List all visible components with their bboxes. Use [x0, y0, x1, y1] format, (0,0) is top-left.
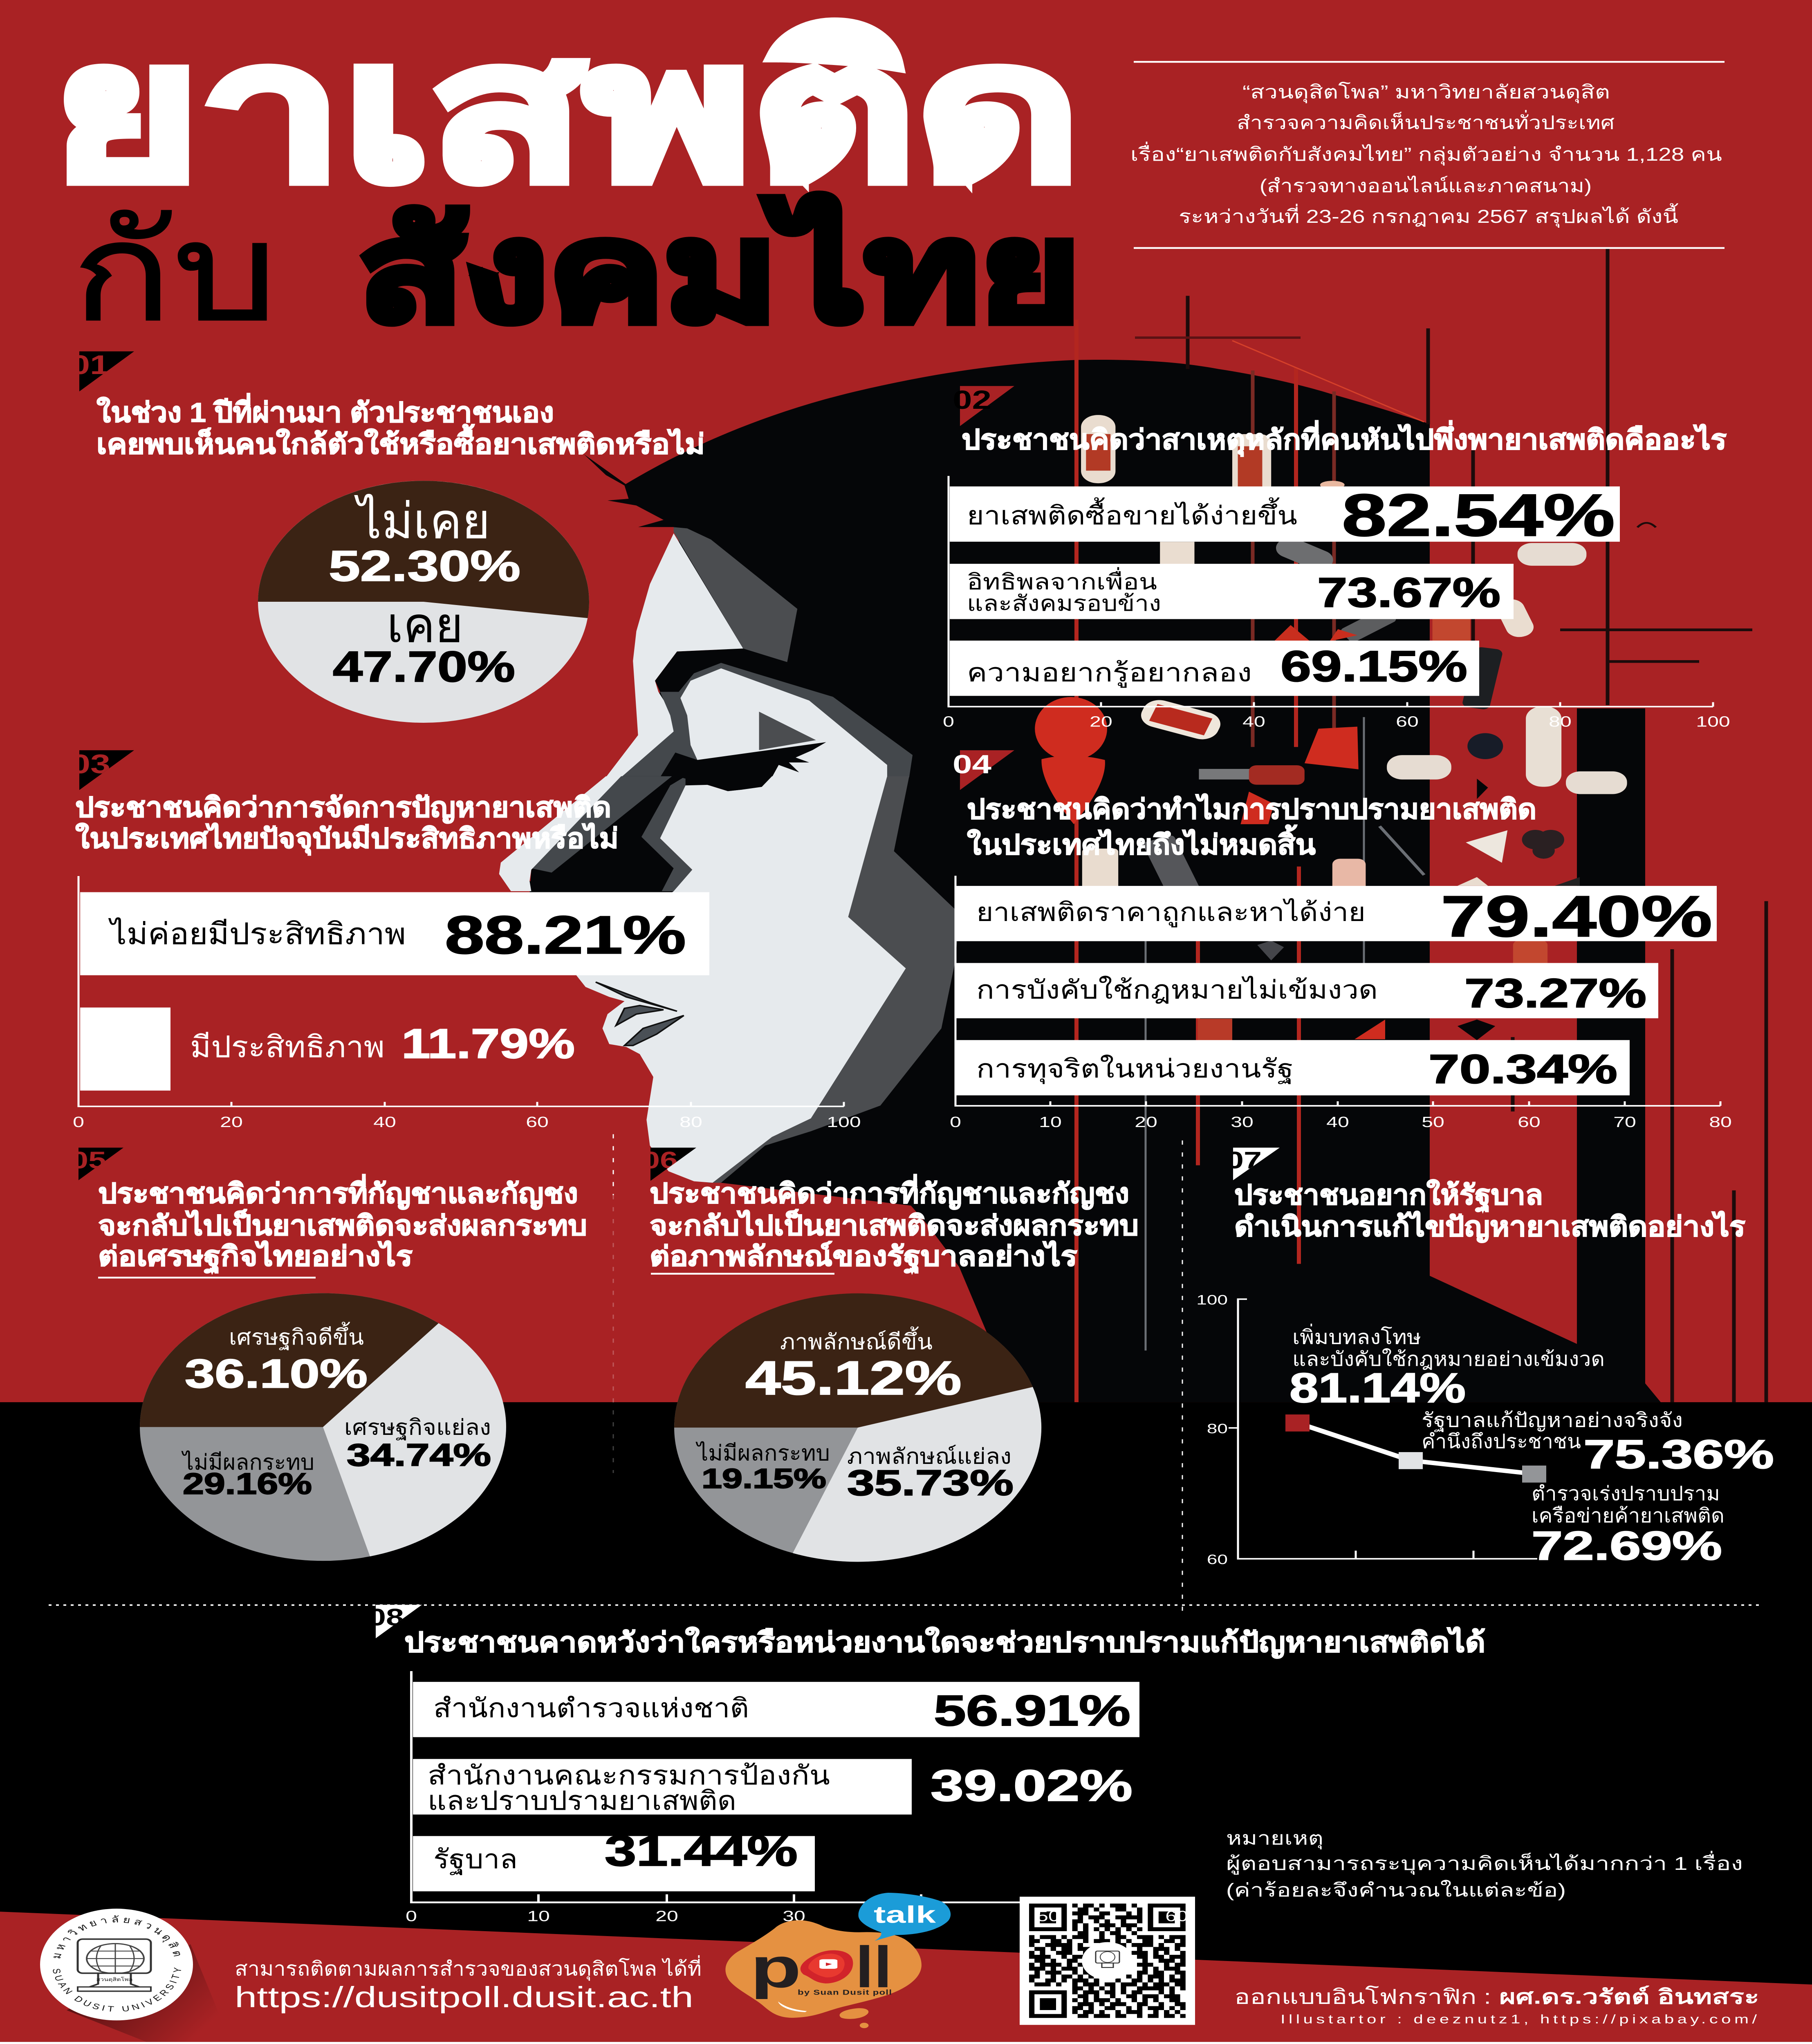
heading 05: จะกลับไปเป็นยาเสพติดจะส่งผลกระทบ [98, 1209, 587, 1241]
pie chart 05: 29.16% [183, 1467, 312, 1500]
bar chart 04: ยาเสพติดราคาถูกและหาได้ง่าย [976, 898, 1366, 928]
logo: Suan Dusit University seal: SUAN DUSIT UNIVERSITY [50, 1967, 184, 2013]
bar chart 04: 80 [1709, 1114, 1732, 1130]
intro text block: เรื่อง“ยาเสพติดกับสังคมไทย” กลุ่มตัวอย่าง จำนวน 1,128 คน [1130, 141, 1722, 166]
bar chart 04: 20 [1135, 1114, 1157, 1130]
pie chart 06: ไม่มีผลกระทบ [695, 1441, 830, 1465]
line chart 07: 81.14% [1289, 1364, 1466, 1411]
logo: talk poll: p [750, 1936, 801, 1999]
pie chart 05 [140, 1293, 506, 1561]
heading 04: ประชาชนคิดว่าทำไมการปราบปรามยาเสพติด [967, 793, 1536, 825]
intro text block: “สวนดุสิตโพล” มหาวิทยาลัยสวนดุสิต [1242, 82, 1610, 103]
bar chart 08: รัฐบาล [433, 1845, 518, 1875]
bar chart 08: และปราบปรามยาเสพติด [428, 1786, 736, 1815]
bar chart 04 [950, 876, 1732, 1130]
bar chart 02: 20 [1090, 713, 1112, 730]
bar chart 02: อิทธิพลจากเพื่อน [967, 567, 1157, 594]
bar chart 03: มีประสิทธิภาพ [190, 1030, 385, 1064]
line chart 07: 100 [1196, 1292, 1228, 1308]
line chart 07: เครือข่ายค้ายาเสพติด [1532, 1505, 1725, 1527]
note text: (ค่าร้อยละจึงคำนวณในแต่ละข้อ) [1226, 1880, 1566, 1901]
artwork: stripes and thin lines [1076, 248, 1766, 1402]
line chart 07 [1196, 1292, 1774, 1569]
bar chart 04: 70 [1613, 1114, 1636, 1130]
heading 05 [98, 1174, 587, 1278]
panel 03: effectiveness of drug management [70, 749, 861, 1130]
title: main heading [52, 5, 1081, 350]
bar chart 08: 30 [783, 1908, 805, 1925]
QR code: 60 [1165, 1908, 1188, 1925]
bar chart 08: สำนักงานตำรวจแห่งชาติ [433, 1694, 749, 1723]
pie chart 05: เศรษฐกิจแย่ลง [344, 1416, 491, 1440]
bar chart 02: 40 [1242, 713, 1265, 730]
bar chart 02: 69.15% [1281, 642, 1467, 691]
bar chart 08: 0 [406, 1908, 417, 1925]
intro text block: ระหว่างวันที่ 23-26 กรกฎาคม 2567 สรุปผลได้ ดังนี้ [1179, 203, 1678, 228]
line chart 07: รัฐบาลแก้ปัญหาอย่างจริงจัง [1422, 1410, 1683, 1432]
background: red upper area [0, 0, 1812, 1402]
heading 06: ประชาชนคิดว่าการที่กัญชาและกัญชง [650, 1174, 1129, 1210]
bar chart 02: 80 [1549, 713, 1572, 730]
bar chart 02: 100 [1696, 713, 1730, 730]
note text [1226, 1828, 1743, 1901]
heading 07: ประชาชนอยากให้รัฐบาล [1234, 1179, 1543, 1213]
bar chart 02: 82.54% [1342, 482, 1615, 549]
heading 03: ในประเทศไทยปัจจุบันมีประสิทธิภาพหรือไม่ [75, 823, 619, 856]
bar chart 08: 31.44% [605, 1827, 798, 1875]
pie chart 06: 35.73% [847, 1463, 1014, 1503]
bar chart 04: 50 [1422, 1114, 1444, 1130]
logo: talk poll: ll [855, 1935, 892, 2000]
pie chart 06: 19.15% [702, 1463, 826, 1494]
pie chart 01: 52.30% [329, 542, 520, 590]
panel 08: expected agencies [368, 1604, 1485, 1925]
logo: Suan Dusit University seal: มหาวิทยาลัยสวนดุสิต [49, 1914, 185, 1960]
logo: Suan Dusit University seal [40, 1909, 231, 2042]
footer red band [0, 1912, 1812, 2042]
heading 03 [75, 792, 619, 856]
heading 01: ในช่วง 1 ปีที่ผ่านมา ตัวประชาชนเอง [96, 393, 554, 428]
note text: ผู้ตอบสามารถระบุความคิดเห็นได้มากกว่า 1 เรื่อง [1226, 1851, 1743, 1875]
bar chart 04: 70.34% [1429, 1046, 1617, 1092]
badge 05: 05 [70, 1147, 106, 1173]
bar chart 02: 60 [1396, 713, 1419, 730]
panel 07: desired government action [1196, 1147, 1774, 1569]
badge 02 [953, 385, 1014, 426]
line chart 07: 80 [1207, 1421, 1228, 1437]
follow text and URL: https://dusitpoll.dusit.ac.th [235, 1981, 693, 2014]
credits [1234, 1985, 1759, 2026]
intro text block [1130, 61, 1725, 249]
panel 01: seen drug use nearby [70, 350, 705, 723]
bar chart 03: 0 [73, 1114, 84, 1130]
credits: ออกแบบอินโฟกราฟิก : [1234, 1985, 1491, 2008]
bar chart 08: สำนักงานคณะกรรมการป้องกัน [428, 1761, 830, 1790]
bar chart 04: 0 [950, 1114, 961, 1130]
badge 08 [368, 1604, 422, 1638]
bar chart 03: 80 [680, 1114, 702, 1130]
line chart 07: 60 [1207, 1552, 1228, 1567]
bar chart 08: 20 [655, 1908, 678, 1925]
bar chart 02: 0 [943, 713, 954, 730]
follow text and URL: สามารถติดตามผลการสำรวจของสวนดุสิตโพล ได้ที่ [235, 1955, 702, 1981]
pie chart 01 [258, 481, 589, 723]
bar chart 04: 30 [1231, 1114, 1254, 1130]
bar chart 02: และสังคมรอบข้าง [967, 592, 1161, 616]
badge 03: 03 [70, 749, 110, 779]
bar chart 04: 73.27% [1464, 970, 1646, 1016]
badge 07: 07 [1226, 1147, 1262, 1173]
background: black lower area [0, 1402, 1812, 2044]
bar chart 08: 56.91% [934, 1686, 1130, 1735]
intro text block: สำรวจความคิดเห็นประชาชนทั่วประเทศ [1237, 110, 1615, 133]
pie chart 01: 47.70% [333, 642, 515, 691]
artwork: black hair silhouette [624, 360, 1661, 1402]
heading 01 [96, 393, 705, 460]
logo: Suan Dusit University seal: สวนดุสิตโพล [96, 1977, 133, 1982]
heading 05: ต่อเศรษฐกิจไทยอย่างไร [98, 1240, 413, 1274]
bar chart 03: 20 [220, 1114, 243, 1130]
badge 01: 01 [70, 350, 110, 380]
badge 01 [79, 352, 134, 392]
bar chart 03: 40 [373, 1114, 396, 1130]
heading 06: จะกลับไปเป็นยาเสพติดจะส่งผลกระทบ [650, 1209, 1139, 1241]
badge 06 [642, 1147, 696, 1181]
credits: ผศ.ดร.วรัตต์ อินทสระ [1499, 1985, 1759, 2008]
heading 08: ประชาชนคาดหวังว่าใครหรือหน่วยงานใดจะช่วยปราบปรามแก้ปัญหายาเสพติดได้ [404, 1626, 1485, 1659]
bar chart 02: 73.67% [1317, 569, 1500, 616]
logo: talk poll: talk [874, 1901, 936, 1928]
bar chart 04: 40 [1326, 1114, 1349, 1130]
bar chart 04: การบังคับใช้กฎหมายไม่เข้มงวด [976, 975, 1378, 1004]
pie chart 05: ไม่มีผลกระทบ [181, 1450, 314, 1475]
line chart 07: ตำรวจเร่งปราบปราม [1532, 1483, 1720, 1505]
line chart 07: 72.69% [1532, 1523, 1722, 1569]
QR code: 50 [1037, 1908, 1060, 1925]
badge 02: 02 [953, 385, 991, 415]
panel 02: causes of turning to drugs [943, 385, 1730, 730]
line chart 07: เพิ่มบทลงโทษ [1292, 1324, 1421, 1348]
artwork: hair wisps [584, 454, 675, 527]
artwork: face upper part [606, 527, 913, 777]
intro text block: (สำรวจทางออนไลน์และภาคสนาม) [1260, 175, 1592, 196]
bar chart 03: ไม่ค่อยมีประสิทธิภาพ [108, 917, 406, 950]
heading 05: ประชาชนคิดว่าการที่กัญชาและกัญชง [98, 1174, 578, 1210]
bar chart 03: 88.21% [445, 905, 686, 965]
QR code [1020, 1897, 1195, 2025]
badge 06: 06 [642, 1147, 678, 1173]
title: main heading: กับ [72, 196, 278, 350]
bar chart 08 [406, 1671, 1177, 1925]
line chart 07: 75.36% [1583, 1432, 1774, 1477]
bar chart 03: 11.79% [401, 1020, 575, 1067]
heading 06: ต่อภาพลักษณ์ของรัฐบาลอย่างไร [650, 1240, 1077, 1274]
note text: หมายเหตุ [1226, 1828, 1323, 1849]
bar chart 04: 10 [1039, 1114, 1062, 1130]
badge 07 [1226, 1147, 1280, 1180]
pie chart 06 [674, 1293, 1041, 1562]
panel 05: economic impact pie [70, 1147, 587, 1561]
credits: Illustartor : deeznutz1, https://pixabay.com/ [1281, 2012, 1757, 2026]
logo: talk poll [725, 1893, 951, 2028]
heading 06 [650, 1174, 1139, 1275]
bar chart 03: 100 [827, 1114, 861, 1130]
artwork: drug pills [1035, 415, 1627, 923]
badge 08: 08 [368, 1604, 404, 1631]
bar chart 08: 10 [527, 1908, 550, 1925]
badge 04: 04 [953, 750, 991, 779]
artwork: more pills behind chart 04 [1198, 877, 1580, 1040]
follow text and URL [235, 1955, 702, 2014]
line chart 07: คำนึงถึงประชาชน [1422, 1431, 1581, 1452]
bar chart 08: 39.02% [931, 1761, 1132, 1810]
bar chart 03: 60 [526, 1114, 549, 1130]
line chart 07: และบังคับใช้กฎหมายอย่างเข้มงวด [1292, 1348, 1605, 1370]
title: main heading: สังคมไทย [358, 193, 1081, 350]
pie chart 06: 45.12% [745, 1351, 962, 1405]
pie chart 01: ไม่เคย [354, 493, 490, 549]
pie chart 05: 34.74% [347, 1438, 491, 1472]
heading 07 [1234, 1179, 1745, 1243]
pie chart 01: เคย [387, 597, 463, 653]
pie chart 06: ภาพลักษณ์ดีขึ้น [780, 1327, 933, 1354]
heading 01: เคยพบเห็นคนใกล้ตัวใช้หรือซื้อยาเสพติดหรือไม่ [96, 424, 705, 460]
panel 04: why suppression fails [950, 750, 1732, 1130]
bar chart 03 [73, 876, 861, 1130]
pie chart 05: 36.10% [185, 1351, 368, 1396]
heading 04 [967, 793, 1536, 861]
pie chart 05: เศรษฐกิจดีขึ้น [229, 1322, 364, 1350]
pie chart 06: ภาพลักษณ์แย่ลง [847, 1445, 1011, 1468]
bar chart 02 [943, 476, 1730, 730]
title: main heading: ยาเสพติด [52, 5, 1081, 219]
badge 03 [79, 750, 134, 790]
bar chart 04: การทุจริตในหน่วยงานรัฐ [976, 1055, 1294, 1084]
artwork: face lower part [499, 776, 960, 1183]
panel 06: government image pie [642, 1147, 1139, 1562]
logo: talk poll: by Suan Dusit poll [798, 1988, 892, 1997]
heading 03: ประชาชนคิดว่าการจัดการปัญหายาเสพติด [75, 792, 611, 824]
bar chart 02: ยาเสพติดซื้อขายได้ง่ายขึ้น [967, 498, 1297, 530]
bar chart 04: 60 [1518, 1114, 1541, 1130]
badge 04 [953, 750, 1014, 790]
badge 05 [78, 1148, 123, 1180]
bar chart 04: 79.40% [1441, 884, 1712, 949]
bar chart 02: ความอยากรู้อยากลอง [967, 659, 1252, 688]
heading 04: ในประเทศไทยถึงไม่หมดสิ้น [967, 825, 1316, 861]
